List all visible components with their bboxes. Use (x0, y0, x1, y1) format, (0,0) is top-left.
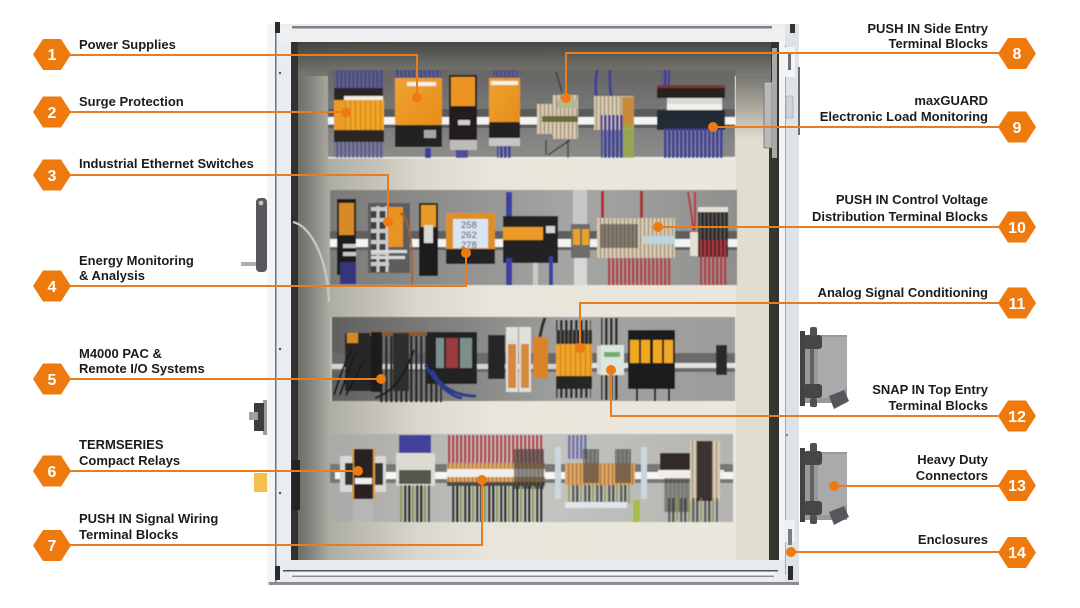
row 1 backplate (328, 70, 735, 158)
callout 8: PUSH IN Side Entry Terminal Blocks: Terminal Blocks (889, 36, 988, 51)
energy monitoring meter: 262 (461, 230, 477, 241)
callout 10: PUSH IN Control Voltage Distribution Terminal Blocks (653, 192, 1036, 242)
PUSH IN signal wiring terminal blocks (447, 435, 545, 522)
callout 14: Enclosures (786, 532, 1036, 568)
callout 4: Energy Monitoring and Analysis: & Analysis (79, 268, 145, 283)
callout 13: Heavy Duty Connectors: Connectors (916, 468, 988, 483)
panel: row 1 power and surge (328, 70, 735, 158)
callout 12: SNAP IN Top Entry Terminal Blocks: Terminal Blocks (889, 398, 988, 413)
callout 3: Industrial Ethernet Switches: 3 (48, 168, 57, 185)
safety relays (628, 330, 675, 401)
callout 9: maxGUARD Electronic Load Monitoring: maxGUARD (914, 93, 988, 108)
callout 11: Analog Signal Conditioning: 11 (1009, 296, 1026, 313)
row 4 backplate (330, 434, 733, 522)
callout 12: SNAP IN Top Entry Terminal Blocks: SNAP IN Top Entry (872, 382, 989, 397)
energy monitoring meter: 278 (461, 240, 477, 251)
industrial ethernet module A (337, 199, 356, 284)
callout 5: M4000 PAC and Remote I/O Systems: 5 (48, 372, 57, 389)
callout 1: Power Supplies: Power Supplies (79, 37, 176, 52)
enclosure interior (291, 42, 779, 560)
power supply narrow (449, 75, 477, 158)
callout 4: Energy Monitoring and Analysis (33, 248, 471, 302)
callout 7: PUSH IN Signal Wiring Terminal Blocks: 7 (48, 538, 57, 555)
energy monitoring meter (446, 213, 495, 264)
ethernet module C (419, 203, 438, 276)
callout 10: PUSH IN Control Voltage Distribution Terminal Blocks: Distribution Terminal Blocks (812, 209, 988, 224)
SNAP IN top entry terminal blocks (597, 318, 624, 400)
red wired terminal blocks (688, 192, 728, 285)
terminal group with bridges (555, 435, 647, 522)
callout 5: M4000 PAC and Remote I/O Systems: Remote I/O Systems (79, 361, 205, 376)
callout 2: Surge Protection: 2 (48, 105, 57, 122)
callout 8: PUSH IN Side Entry Terminal Blocks (561, 21, 1036, 103)
callout 14: Enclosures: 14 (1008, 545, 1026, 562)
yellow lamp (254, 473, 267, 492)
power supply medium (489, 70, 520, 158)
energy monitoring meter: 258 (461, 220, 477, 231)
callout 7: PUSH IN Signal Wiring Terminal Blocks: PUSH IN Signal Wiring (79, 511, 218, 526)
callout 13: Heavy Duty Connectors: 13 (1008, 478, 1026, 495)
callout 2: Surge Protection: Surge Protection (79, 94, 184, 109)
callout 11: Analog Signal Conditioning (575, 285, 1036, 353)
door handle (241, 198, 267, 272)
analog signal conditioning (556, 320, 592, 398)
callout 4: Energy Monitoring and Analysis: Energy Monitoring (79, 253, 194, 268)
TERMSERIES compact relays (340, 449, 386, 522)
enclosure cabinet (241, 22, 849, 585)
PUSH IN control voltage distribution terminal blocks (597, 191, 675, 285)
callout 7: PUSH IN Signal Wiring Terminal Blocks: Terminal Blocks (79, 527, 178, 542)
callout 6: TERMSERIES Compact Relays (33, 437, 363, 486)
callout 6: TERMSERIES Compact Relays: 6 (48, 464, 57, 481)
callout 3: Industrial Ethernet Switches: Industrial Ethernet Switches (79, 156, 254, 171)
DIN rail end stop (716, 345, 727, 375)
callout 13: Heavy Duty Connectors (829, 452, 1036, 501)
callout 5: M4000 PAC and Remote I/O Systems (33, 346, 386, 394)
terminal group right (658, 441, 724, 522)
row 2 backplate (330, 190, 737, 285)
M4000 PAC controller (334, 332, 477, 402)
callout 5: M4000 PAC and Remote I/O Systems: M4000 PAC & (79, 346, 162, 361)
callout 9: maxGUARD Electronic Load Monitoring (708, 93, 1036, 142)
callout 8: PUSH IN Side Entry Terminal Blocks: 8 (1013, 46, 1022, 63)
door latch (249, 400, 267, 435)
row 3 backplate (332, 317, 735, 401)
PUSH IN side entry terminal blocks (537, 72, 578, 158)
callout 1: Power Supplies: 1 (48, 47, 57, 64)
callout 12: SNAP IN Top Entry Terminal Blocks (606, 365, 1036, 432)
panel: row 4 relays and signal wiring (330, 434, 733, 522)
callout 8: PUSH IN Side Entry Terminal Blocks: PUSH IN Side Entry (867, 21, 989, 36)
panel: row 3 PAC and signal conditioning (332, 317, 735, 402)
fuse terminals (571, 190, 590, 285)
heavy duty connector upper (800, 327, 849, 409)
terminal blocks with blue and green wires (594, 70, 634, 158)
callout 12: SNAP IN Top Entry Terminal Blocks: 12 (1008, 409, 1026, 426)
heavy duty connector lower (800, 443, 849, 525)
surge protection modules (334, 70, 384, 158)
callout 13: Heavy Duty Connectors: Heavy Duty (917, 452, 989, 467)
terminal blocks with blue wires (396, 435, 435, 522)
callout 9: maxGUARD Electronic Load Monitoring: Electronic Load Monitoring (820, 109, 988, 124)
callout 6: TERMSERIES Compact Relays: Compact Relays (79, 453, 180, 468)
maxGUARD electronic load monitoring (657, 70, 725, 158)
power supply large (395, 70, 442, 158)
energy analysis module (503, 192, 558, 285)
remote I/O system (488, 318, 548, 392)
panel: row 2 ethernet and monitoring (330, 190, 737, 285)
callout 1: Power Supplies (33, 37, 422, 103)
callout 3: Industrial Ethernet Switches (33, 156, 393, 227)
callout 14: Enclosures: Enclosures (918, 532, 988, 547)
callout 2: Surge Protection (33, 94, 351, 128)
callout 6: TERMSERIES Compact Relays: TERMSERIES (79, 437, 164, 452)
callout 11: Analog Signal Conditioning: Analog Signal Conditioning (818, 285, 988, 300)
callout 7: PUSH IN Signal Wiring Terminal Blocks (33, 475, 487, 561)
industrial ethernet switch (368, 203, 412, 285)
callout 10: PUSH IN Control Voltage Distribution Terminal Blocks: 10 (1008, 220, 1026, 237)
callout 10: PUSH IN Control Voltage Distribution Terminal Blocks: PUSH IN Control Voltage (836, 192, 988, 207)
callout 9: maxGUARD Electronic Load Monitoring: 9 (1013, 120, 1022, 137)
callout 4: Energy Monitoring and Analysis: 4 (48, 279, 57, 296)
enclosure outer frame (267, 22, 800, 585)
